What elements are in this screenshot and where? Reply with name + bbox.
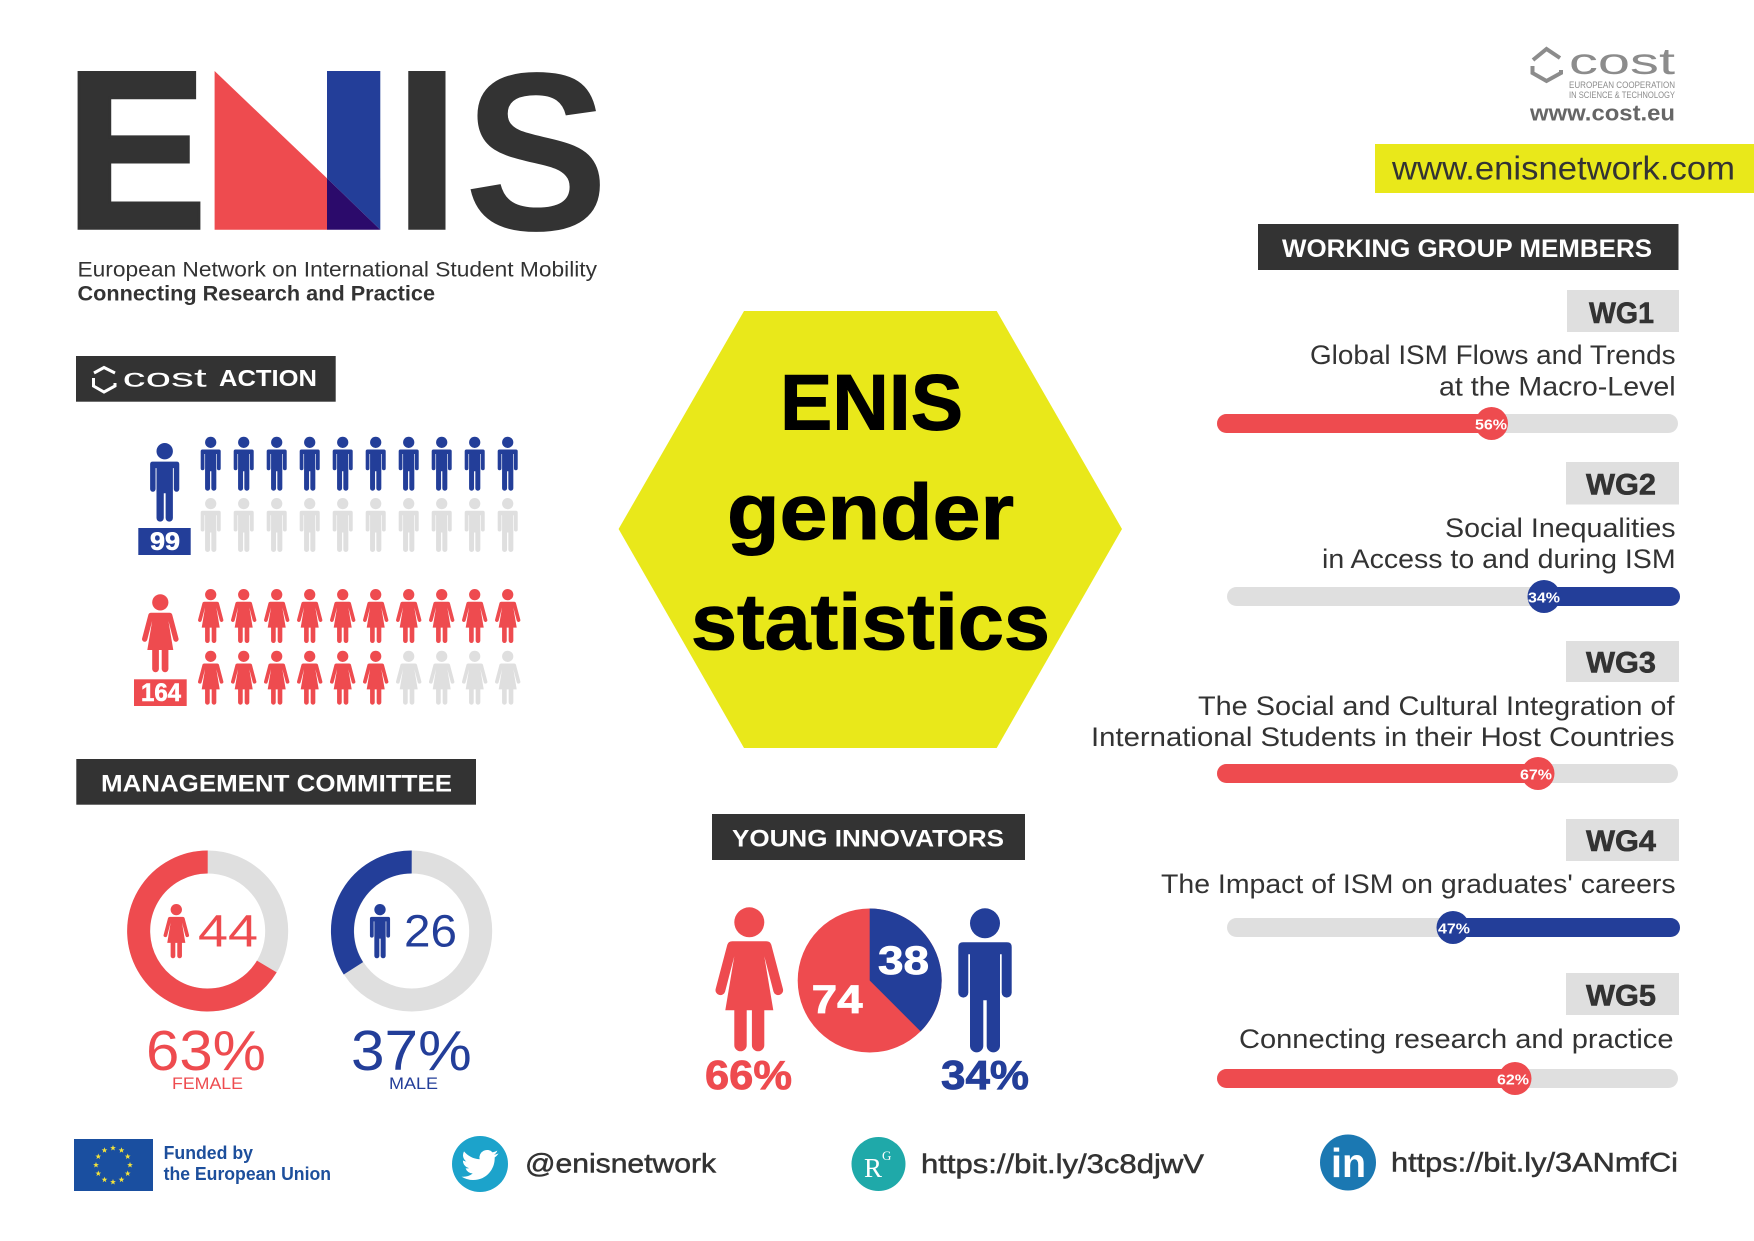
- panel: WG4: [1161, 819, 1680, 944]
- funding statement: the European Union: [164, 1164, 331, 1184]
- young innovators male percentage: 34%: [941, 1052, 1029, 1098]
- WG2 description: Social Inequalities: [1445, 513, 1676, 543]
- heading: young innovators: YOUNG INNOVATORS: [732, 826, 1004, 853]
- logo letter I: I: [391, 21, 463, 279]
- young innovators female percentage: 66%: [705, 1052, 792, 1098]
- Twitter handle: @enisnetwork: [525, 1149, 717, 1179]
- female count: 44: [198, 906, 258, 957]
- icon: ResearchGate: [852, 1137, 906, 1191]
- female percentage: 63%: [146, 1019, 266, 1083]
- network name: European Network on International Student Mobility: [78, 259, 598, 282]
- male percentage: 37%: [351, 1019, 472, 1083]
- WG2 progress bar: 34%: [1528, 589, 1560, 606]
- logo N: dark overlap: [327, 178, 380, 230]
- female label: FEMALE: [172, 1074, 243, 1093]
- panel: WG1: WG1: [1589, 297, 1654, 330]
- panel: WG3: WG3: [1586, 646, 1656, 680]
- COST descriptor line 1: EUROPEAN COOPERATION: [1569, 80, 1675, 91]
- LinkedIn link: https://bit.ly/3ANmfCi: [1391, 1148, 1678, 1178]
- male members: large icon: [150, 443, 179, 522]
- icon: ResearchGate: R: [864, 1153, 882, 1183]
- WG1 progress bar: 56%: [1475, 416, 1507, 433]
- ResearchGate link: https://bit.ly/3c8djwV: [921, 1149, 1204, 1179]
- heading: working group members: [1258, 224, 1678, 270]
- male count badge: 99: [150, 528, 180, 556]
- WG5 description: Connecting research and practice: [1239, 1024, 1674, 1054]
- WG5 progress bar: [1217, 1062, 1678, 1095]
- network tagline: Connecting Research and Practice: [78, 283, 435, 306]
- WG3 progress bar: 67%: [1520, 766, 1552, 783]
- WG3 description: International Students in their Host Countries: [1091, 722, 1674, 752]
- male count badge: [138, 528, 191, 556]
- panel: WG2: [1227, 462, 1680, 613]
- WG2 progress bar: [1227, 580, 1680, 613]
- female members: large icon: [142, 594, 179, 672]
- logo letter S: S: [464, 25, 608, 278]
- WG3 description: The Social and Cultural Integration of: [1198, 691, 1675, 721]
- icon: Twitter: [452, 1136, 508, 1192]
- icon: woman large: [715, 907, 783, 1051]
- WG2 description: in Access to and during ISM: [1322, 544, 1676, 574]
- heading: young innovators: [712, 814, 1025, 860]
- logo N: blue bar: [327, 71, 380, 230]
- COST wordmark: cost: [1569, 41, 1676, 82]
- panel: WG5: [1217, 973, 1679, 1095]
- icon: ResearchGate: G: [882, 1148, 891, 1163]
- panel: WG4: WG4: [1586, 825, 1656, 858]
- funding statement: Funded by: [164, 1143, 253, 1163]
- ENIS logo: [65, 21, 608, 279]
- donut chart: female: [139, 862, 277, 1000]
- female count badge: 164: [141, 679, 181, 707]
- WG4 progress bar: 47%: [1438, 920, 1470, 937]
- title line 2: gender: [727, 467, 1014, 556]
- pictogram row: male filled: [201, 437, 518, 491]
- central yellow hexagon with title: [619, 311, 1122, 748]
- COST website: www.cost.eu: [1529, 100, 1675, 126]
- heading: management committee: [76, 759, 476, 805]
- heading: management committee: MANAGEMENT COMMITTEE: [101, 770, 452, 797]
- heading: working group members: WORKING GROUP MEMBERS: [1282, 235, 1652, 263]
- icon: EU flag: [74, 1139, 153, 1191]
- website banner: [1375, 144, 1754, 193]
- WG4 progress bar: [1227, 911, 1680, 944]
- donut chart: male: [342, 862, 481, 1000]
- heading: COST action: [76, 356, 336, 402]
- WG4 description: The Impact of ISM on graduates' careers: [1161, 869, 1676, 899]
- panel: WG1: [1217, 290, 1679, 440]
- WG1 description: at the Macro-Level: [1439, 372, 1676, 402]
- pictogram row: female mixed: [198, 651, 520, 705]
- WG1 progress bar: [1217, 407, 1678, 440]
- pictogram row: female filled: [198, 589, 520, 643]
- title line 1: ENIS: [780, 358, 963, 446]
- icon: COST hexagon: [1532, 49, 1561, 81]
- COST descriptor line 2: IN SCIENCE & TECHNOLOGY: [1569, 90, 1676, 101]
- pie chart: young innovators: [798, 908, 942, 1052]
- female value: 74: [812, 978, 864, 1022]
- title line 3: statistics: [691, 577, 1050, 666]
- WG5 progress bar: 62%: [1497, 1071, 1529, 1088]
- panel: WG2: WG2: [1586, 468, 1656, 502]
- WG1 description: Global ISM Flows and Trends: [1310, 340, 1676, 370]
- logo N: red triangle: [215, 71, 327, 230]
- pictogram row: male grey: [201, 498, 518, 552]
- icon: LinkedIn: [1320, 1134, 1376, 1190]
- WG3 progress bar: [1217, 757, 1678, 790]
- male value: 38: [878, 939, 929, 983]
- COST wordmark white: cost: [123, 363, 208, 393]
- logo letter E: E: [65, 24, 207, 277]
- icon: man large: [958, 908, 1012, 1052]
- website banner: www.enisnetwork.com: [1391, 150, 1735, 186]
- male count: 26: [404, 906, 457, 957]
- COST logo top right: [1532, 41, 1676, 101]
- icon: LinkedIn: in: [1331, 1140, 1366, 1186]
- icon: COST hexagon white: [94, 368, 115, 392]
- heading: COST action: ACTION: [219, 365, 317, 391]
- male label: MALE: [389, 1074, 438, 1093]
- panel: WG3: [1091, 641, 1679, 790]
- icon: man: [370, 904, 390, 958]
- icon: woman: [164, 904, 189, 958]
- panel: WG5: WG5: [1586, 980, 1656, 1012]
